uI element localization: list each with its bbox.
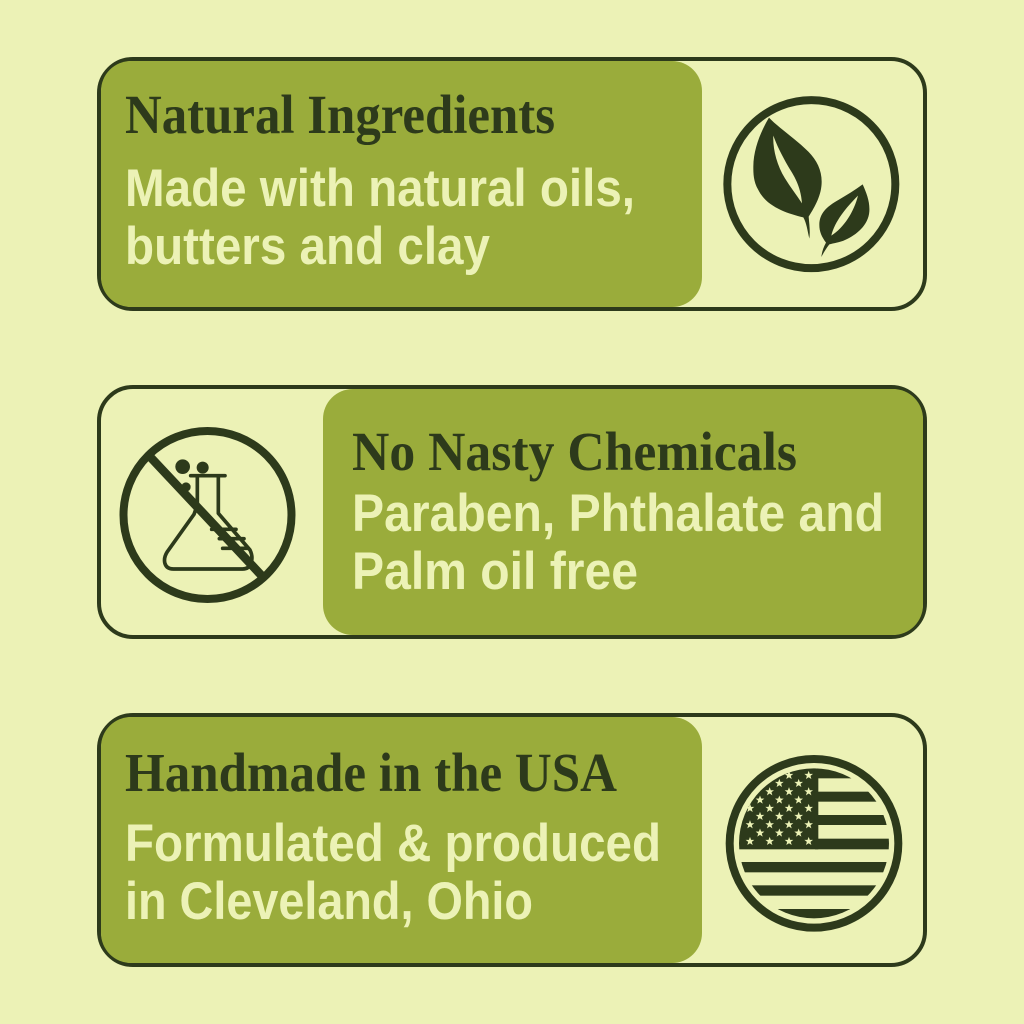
panel: handmade in the usa bbox=[99, 715, 925, 965]
icon: crossed-out flask bbox=[123, 431, 291, 599]
icon: round american flag bbox=[730, 759, 898, 928]
body text: in Cleveland, Ohio bbox=[125, 872, 533, 931]
heading: Natural Ingredients bbox=[125, 84, 555, 145]
green text block bbox=[101, 717, 702, 963]
body text: butters and clay bbox=[125, 217, 490, 276]
body text: Palm oil free bbox=[352, 542, 638, 601]
body text: Made with natural oils, bbox=[125, 159, 635, 218]
panel: natural ingredients bbox=[99, 59, 925, 309]
green text block bbox=[323, 389, 923, 635]
body text: Paraben, Phthalate and bbox=[352, 484, 884, 543]
infographic canvas bbox=[97, 57, 927, 967]
heading: No Nasty Chemicals bbox=[352, 421, 797, 482]
icon: leaves bbox=[727, 100, 895, 268]
green text block bbox=[101, 61, 702, 307]
body text: Formulated & produced bbox=[125, 814, 661, 873]
heading: Handmade in the USA bbox=[125, 742, 617, 803]
panel: no nasty chemicals bbox=[99, 387, 925, 637]
